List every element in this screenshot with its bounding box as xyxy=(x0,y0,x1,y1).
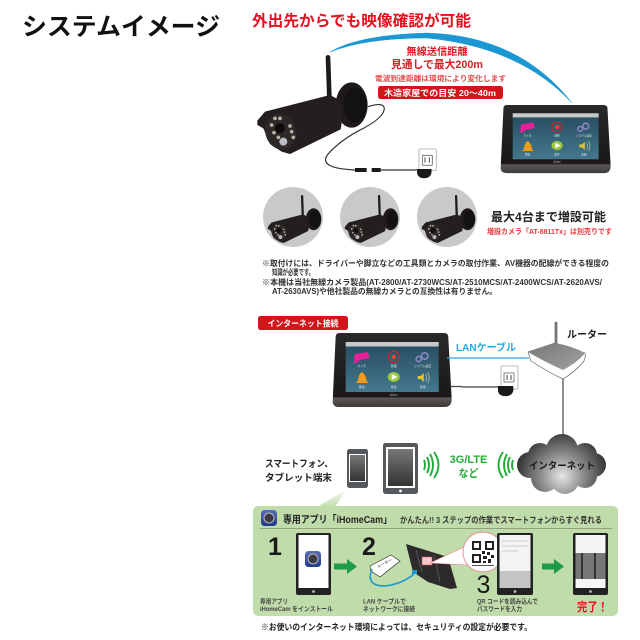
QR callout wedge xyxy=(422,547,467,565)
screen labels xyxy=(524,133,592,157)
cable connector xyxy=(355,168,381,172)
icon: record xyxy=(552,122,562,132)
icon: camera xyxy=(257,57,368,154)
icon: wireless waves right xyxy=(498,452,513,478)
step 2 number: 2 xyxy=(362,533,376,561)
panel subheading: かんたん!! 3 ステップの作業でスマートフォンからすぐ見れる xyxy=(400,514,602,525)
cloud label: インターネット xyxy=(529,460,595,472)
icon: alarm bell xyxy=(522,141,534,151)
camera with cable and power adapter xyxy=(257,57,436,178)
icon: smartphone xyxy=(347,449,368,488)
step 1 caption: iHomeCam をインストール xyxy=(260,605,333,613)
screen labels xyxy=(357,363,431,389)
step 1 number: 1 xyxy=(268,533,282,561)
icon: settings xyxy=(416,353,428,362)
step 1 caption xyxy=(260,596,333,613)
step 2 caption: ネットワークに接続 xyxy=(363,604,415,613)
range heading: 無線送信距離 xyxy=(406,45,468,58)
callout: wireless range xyxy=(375,45,506,99)
step 3 number: 3 xyxy=(477,571,490,599)
power adapter xyxy=(417,169,432,178)
arrow xyxy=(334,559,357,574)
step 3 caption: パスワードを入力 xyxy=(477,604,522,613)
installation and compatibility notes xyxy=(262,258,609,296)
installation and compatibility notes: AT-2630AVS)や他社製品の無線カメラとの互換性は有りません。 xyxy=(272,286,497,296)
QR code magnifier xyxy=(463,532,503,572)
screen labels: カメラ xyxy=(524,133,532,137)
internet connection pill xyxy=(258,316,348,330)
brand: Aiter xyxy=(390,393,398,397)
camera circle 3 xyxy=(417,187,477,247)
screen labels: 音量 xyxy=(420,384,426,389)
brand: Aiter xyxy=(553,160,562,164)
internet cloud xyxy=(517,434,606,494)
icon: pink camera xyxy=(354,352,370,363)
screen labels: システム設定 xyxy=(414,363,431,368)
screen labels: 再生 xyxy=(391,384,397,389)
router box xyxy=(370,555,400,577)
3G/LTE label xyxy=(450,454,487,480)
installation and compatibility notes: 知識が必要です。 xyxy=(272,267,314,277)
icon: play xyxy=(552,141,563,150)
router box: ルーター xyxy=(376,556,393,569)
power adapter xyxy=(498,386,513,396)
complete label: 完了！ xyxy=(577,599,608,614)
installation and compatibility notes: ※取付けには、ドライバーや脚立などの工具類とカメラの取付作業、AV機器の配線ができる程度の xyxy=(262,258,609,268)
step 2 caption xyxy=(363,596,415,613)
icon: play xyxy=(388,372,400,382)
step 2 caption: LAN ケーブルで xyxy=(363,596,406,606)
LAN cable label: LANケーブル xyxy=(456,341,516,354)
tablet monitor (wireless) xyxy=(501,105,611,173)
camera circle 1 xyxy=(263,187,323,247)
icon: volume xyxy=(418,372,429,383)
title: システムイメージ xyxy=(22,14,220,41)
icon: pink camera xyxy=(520,122,535,133)
heading: up to four cameras: 最大4台まで増設可能 xyxy=(491,209,606,224)
step 3 caption xyxy=(477,596,538,613)
step 1 caption: 専用アプリ xyxy=(260,596,288,606)
blue LAN cable xyxy=(370,569,414,586)
wireless signal arc xyxy=(330,33,572,103)
icon: app xyxy=(261,510,277,526)
panel: iHomeCam app steps xyxy=(253,506,618,616)
pointer from phone to app panel xyxy=(317,489,347,507)
icon: settings xyxy=(578,123,589,131)
step 3 phone xyxy=(497,533,533,595)
internet connection pill: インターネット接続 xyxy=(268,318,339,328)
footer note: ※お使いのインターネット環境によっては、セキュリティの設定が必要です。 xyxy=(261,621,532,632)
arrow xyxy=(542,559,564,574)
monitor rear xyxy=(406,544,457,589)
tablet monitor (network) xyxy=(333,333,452,407)
camera circle 2 xyxy=(340,187,400,247)
icon: volume xyxy=(579,141,590,151)
icon: alarm bell xyxy=(356,372,369,383)
heading: remote viewing: 外出先からでも映像確認が可能 xyxy=(252,11,471,30)
3G/LTE label: など xyxy=(458,466,478,480)
smartphone and tablet label xyxy=(265,459,333,484)
add-on cameras xyxy=(263,187,477,247)
range note: 電波到達距離は環境により変化します xyxy=(375,74,506,83)
range value: 見通しで最大200m xyxy=(391,57,483,71)
panel heading: 専用アプリ「iHomeCam」 xyxy=(283,513,392,526)
installation and compatibility notes: ※本機は当社無線カメラ製品(AT-2800/AT-2730WCS/AT-2510MCS/AT-2400WCS/AT-2620AVS/ xyxy=(262,277,603,287)
icon: record xyxy=(388,351,399,363)
monitor power cable xyxy=(450,386,498,388)
router to internet line xyxy=(562,379,564,436)
screen labels: カメラ xyxy=(357,363,366,368)
wooden house range pill: 木造家屋での目安 20～40m xyxy=(384,88,496,98)
icon: wireless waves left xyxy=(424,452,438,478)
router xyxy=(528,323,585,379)
screen labels: 再生 xyxy=(554,153,560,157)
screen labels: 音量 xyxy=(581,153,587,157)
power outlet xyxy=(501,366,518,389)
screen labels: 録画 xyxy=(391,363,397,368)
add-on camera note: 増設カメラ「AT-8811Tx」は別売りです xyxy=(487,226,612,236)
step 3 caption: QR コードを読み込んで xyxy=(477,596,538,606)
step 1 phone xyxy=(296,533,331,595)
3G/LTE label: 3G/LTE xyxy=(450,454,487,466)
screen labels: 録画 xyxy=(554,133,560,137)
power outlet xyxy=(419,149,436,170)
screen labels: 警報 xyxy=(359,384,365,389)
smartphone and tablet label: スマートフォン、 xyxy=(265,459,333,470)
screen labels: システム設定 xyxy=(576,133,592,137)
camera cable xyxy=(326,105,418,170)
screen labels: 警報 xyxy=(525,153,531,157)
finished phone xyxy=(573,533,608,595)
icon: tablet xyxy=(383,443,418,494)
smartphone and tablet label: タブレット端末 xyxy=(265,472,332,484)
router label: ルーター xyxy=(567,329,607,341)
LAN cable line xyxy=(447,357,529,359)
